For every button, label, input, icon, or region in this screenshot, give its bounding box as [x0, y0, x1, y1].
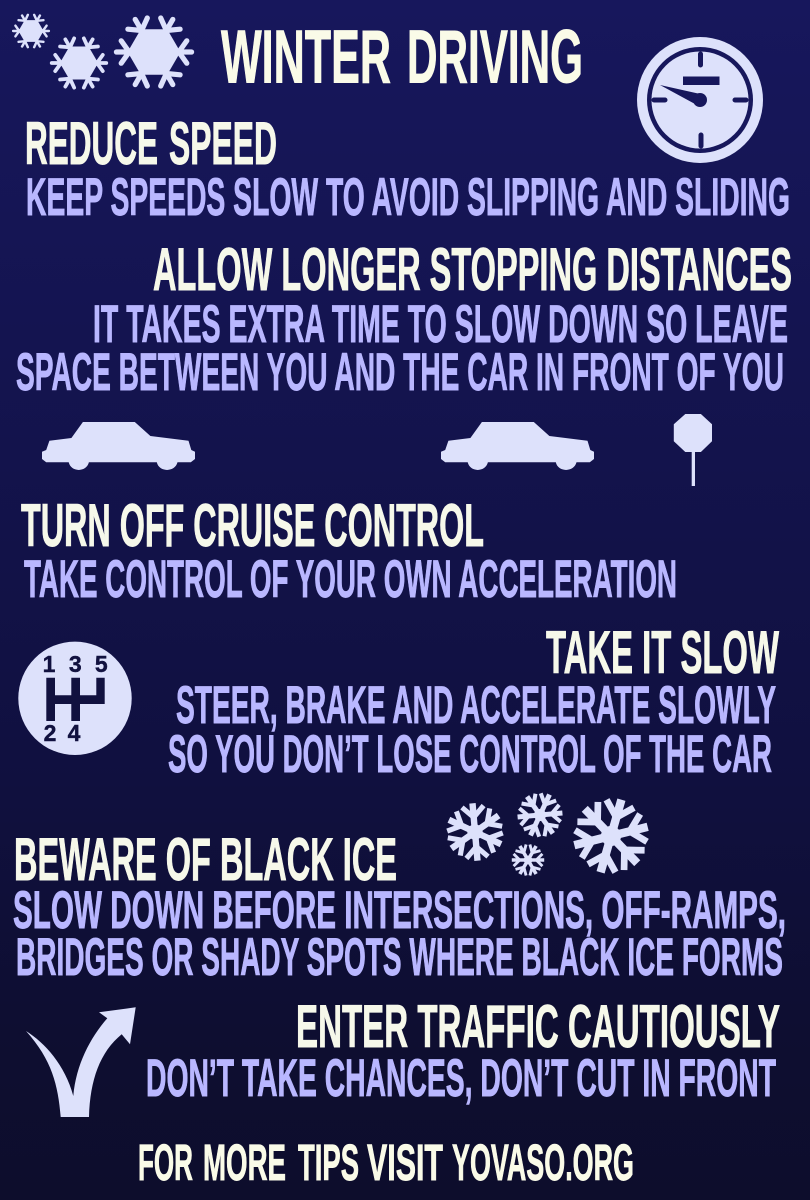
icon: gear shift: 3 — [69, 651, 82, 677]
footer: more tips: YOVASO.ORG — [452, 1134, 634, 1191]
footer: more tips: TIPS — [298, 1134, 359, 1191]
icon: stop sign — [674, 414, 712, 486]
icon: gear shift: 5 — [95, 651, 108, 677]
icon: gear shift: 4 — [68, 720, 81, 746]
footer: more tips: MORE — [203, 1134, 286, 1191]
heading: reduce speed: REDUCE — [25, 110, 158, 177]
footer: more tips: VISIT — [367, 1134, 443, 1191]
icon: speedometer — [637, 37, 763, 163]
icon: car left — [42, 422, 195, 470]
icon: gear shift — [18, 642, 132, 755]
icon: merge arrow — [26, 1007, 136, 1117]
icon: three snowflakes top left — [13, 13, 192, 91]
title: WINTER — [221, 14, 391, 98]
footer: more tips: FOR — [138, 1134, 193, 1191]
heading: reduce speed: SPEED — [169, 110, 277, 177]
heading: black ice: BEWARE OF BLACK ICE — [14, 826, 397, 893]
title: DRIVING — [407, 14, 583, 98]
icon: gear shift: 2 — [44, 720, 56, 746]
icon: gear shift: 1 — [43, 651, 56, 677]
footer: more tips — [138, 1134, 634, 1191]
icon: car right — [441, 422, 594, 470]
icon: four snowflakes — [436, 788, 657, 884]
